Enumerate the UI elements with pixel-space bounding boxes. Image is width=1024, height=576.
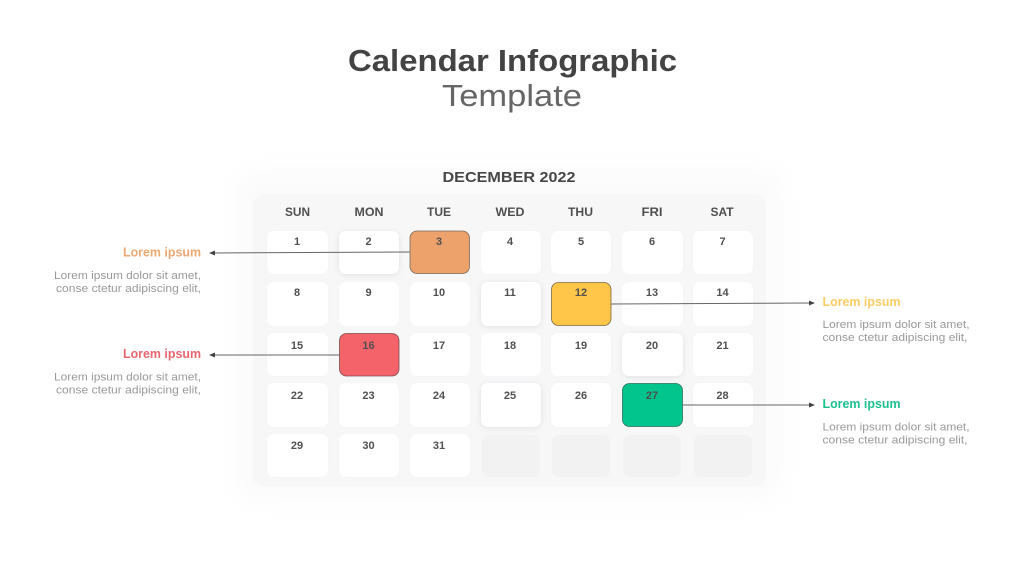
- panel background: [253, 195, 766, 486]
- date cells: [267, 231, 753, 477]
- date numbers: 17: [433, 340, 445, 352]
- date numbers: 23: [362, 390, 375, 402]
- date numbers: 8: [294, 287, 300, 299]
- panel: calendar: [238, 170, 781, 500]
- date numbers: 7: [719, 236, 726, 248]
- date numbers: 2: [365, 236, 372, 248]
- callout: red: [54, 347, 201, 396]
- highlighted date: 16: [340, 334, 399, 376]
- callout: yellow: Lorem ipsum dolor sit amet,: [822, 319, 970, 331]
- date numbers: [291, 236, 729, 452]
- callout: red: Lorem ipsum dolor sit amet,: [54, 372, 201, 384]
- date numbers: 12: [575, 287, 587, 299]
- panel glow: [238, 170, 781, 500]
- arrow: date 27 to right callout: [682, 402, 815, 408]
- callout: orange: Lorem ipsum: [123, 246, 201, 260]
- weekday headers: [285, 205, 734, 219]
- date numbers: 21: [716, 340, 729, 352]
- date numbers: 16: [362, 340, 375, 352]
- arrow: date 16 to left callout: [209, 352, 340, 358]
- date numbers: 14: [716, 287, 729, 299]
- date numbers: 10: [433, 287, 445, 299]
- date numbers: 26: [575, 390, 587, 402]
- weekday headers: SAT: [710, 205, 734, 219]
- date numbers: 5: [578, 236, 584, 248]
- date numbers: 6: [649, 236, 655, 248]
- date numbers: 3: [436, 236, 442, 248]
- title: Calendar Infographic: [348, 43, 677, 78]
- title: [348, 43, 677, 113]
- title: Template: [442, 78, 582, 113]
- weekday headers: WED: [496, 205, 525, 219]
- date numbers: 20: [646, 340, 658, 352]
- callout: yellow: [822, 295, 970, 344]
- date numbers: 11: [504, 287, 516, 299]
- weekday headers: TUE: [427, 205, 451, 219]
- callout: red: conse ctetur adipiscing elit,: [56, 384, 201, 396]
- callout: green: Lorem ipsum dolor sit amet,: [822, 422, 970, 434]
- date numbers: 25: [504, 390, 516, 402]
- arrow: date 3 to left callout: [209, 250, 410, 256]
- date numbers: 28: [716, 390, 729, 402]
- callout: red: Lorem ipsum: [123, 347, 201, 361]
- date numbers: 24: [433, 390, 446, 402]
- callout: orange: conse ctetur adipiscing elit,: [56, 283, 201, 295]
- date numbers: 27: [646, 390, 658, 402]
- month heading: DECEMBER 2022: [442, 169, 576, 186]
- highlighted date: 12: [552, 282, 611, 326]
- callout: yellow: conse ctetur adipiscing elit,: [822, 332, 968, 344]
- date numbers: 4: [507, 236, 514, 248]
- callout: green: Lorem ipsum: [822, 397, 900, 411]
- date numbers: 1: [294, 236, 300, 248]
- date numbers: 22: [291, 390, 303, 402]
- date numbers: 31: [433, 440, 445, 452]
- callout: orange: [54, 246, 201, 295]
- date numbers: 9: [365, 287, 372, 299]
- highlighted date: 27: [622, 384, 682, 426]
- callout: green: [822, 397, 970, 446]
- weekday headers: FRI: [642, 205, 662, 219]
- date numbers: 19: [575, 340, 587, 352]
- arrow: date 12 to right callout: [611, 300, 815, 306]
- date numbers: 13: [646, 287, 658, 299]
- highlighted date: 3: [410, 231, 470, 274]
- weekday headers: THU: [568, 205, 593, 219]
- date numbers: 15: [291, 340, 303, 352]
- date numbers: 30: [362, 440, 375, 452]
- callout: yellow: Lorem ipsum: [822, 295, 900, 309]
- callout: green: conse ctetur adipiscing elit,: [822, 434, 968, 446]
- date numbers: 18: [504, 340, 516, 352]
- weekday headers: MON: [354, 205, 384, 219]
- weekday headers: SUN: [285, 205, 310, 219]
- callout: orange: Lorem ipsum dolor sit amet,: [54, 270, 201, 282]
- date numbers: 29: [291, 440, 303, 452]
